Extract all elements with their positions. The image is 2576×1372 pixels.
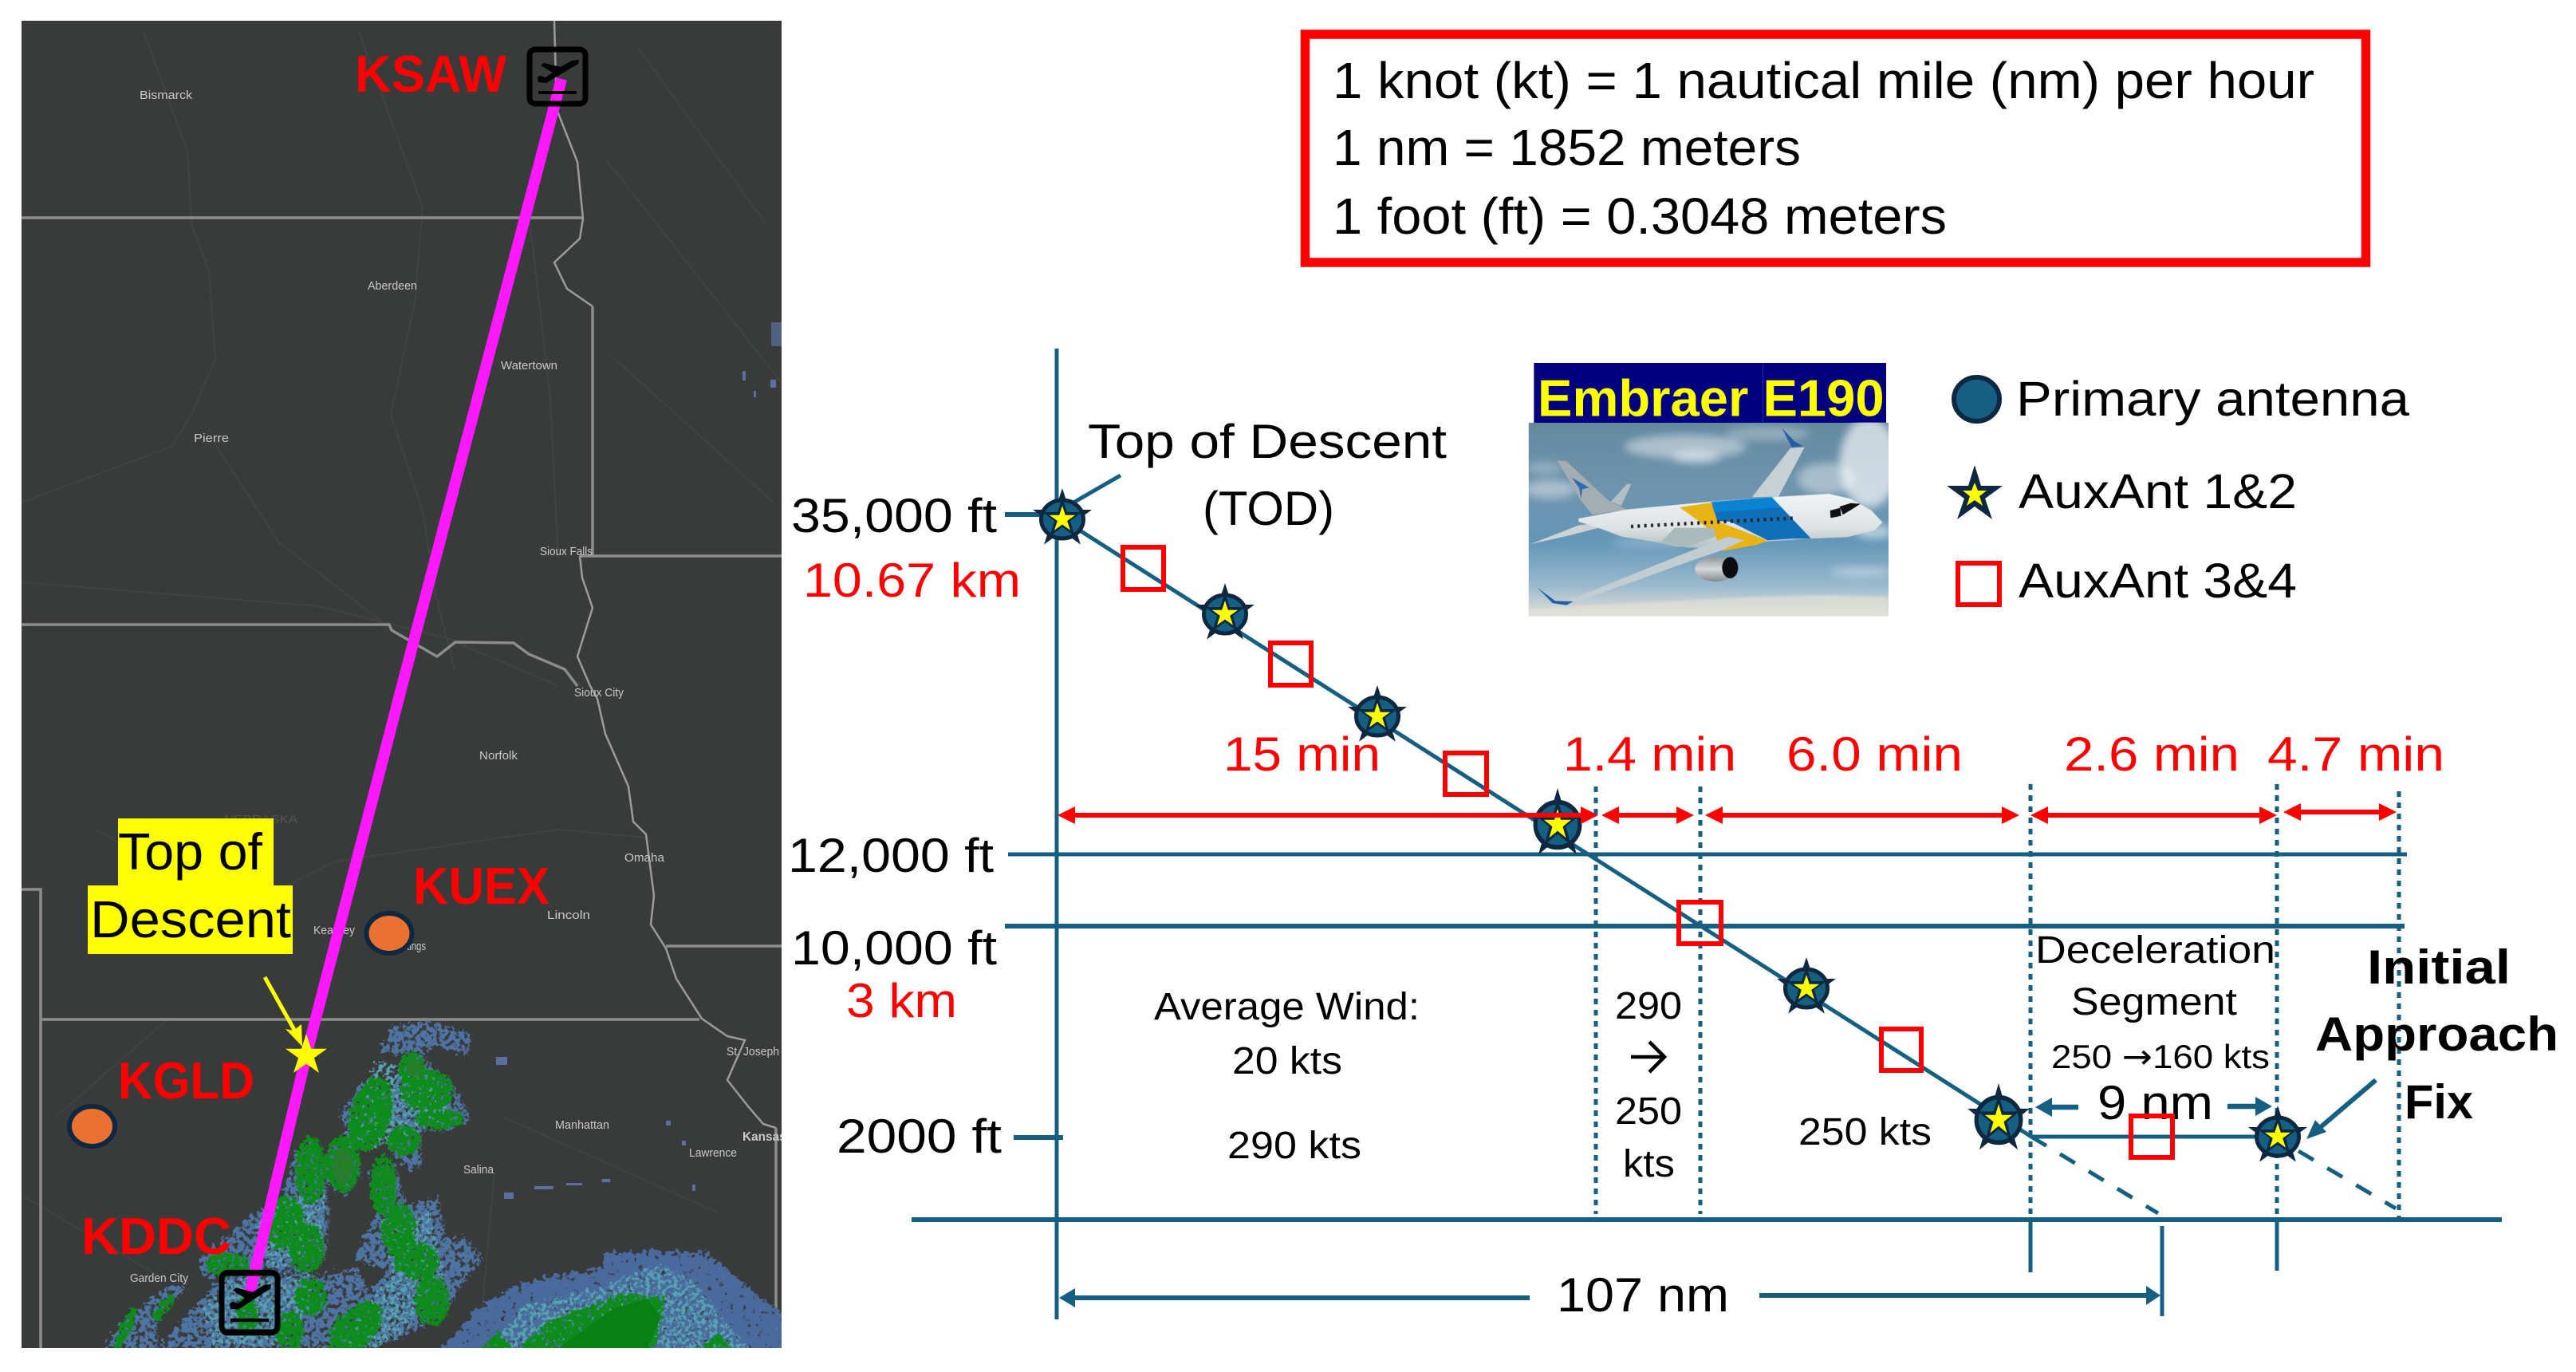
near wing bbox=[1574, 536, 1745, 598]
dimension: 107 nm: 107 nm bbox=[1557, 1268, 1729, 1322]
altitude labels bbox=[788, 489, 1021, 1163]
panel: unit conversions: 1 nm = 1852 meters bbox=[1333, 119, 1801, 176]
label: KSAW: KSAW bbox=[355, 45, 507, 103]
city labels: Kansas City bbox=[742, 1130, 813, 1144]
windows bbox=[1631, 518, 1796, 526]
label: top of descent: Top of Descent bbox=[1088, 415, 1447, 468]
city labels: Manhattan bbox=[555, 1118, 609, 1132]
panel: unit conversions bbox=[1305, 34, 2365, 262]
label: speed change 290 to 250 kts: kts bbox=[1623, 1143, 1675, 1185]
city labels: Garden City bbox=[130, 1271, 188, 1285]
city labels: Salina bbox=[463, 1163, 494, 1177]
label: deceleration segment: 250 →160 kts bbox=[2051, 1037, 2270, 1076]
red time arrows bbox=[1058, 803, 2397, 824]
engine bbox=[1695, 557, 1729, 582]
dimension: 107 nm bbox=[1059, 1268, 2160, 1322]
title bar: Embraer E190 bbox=[1538, 369, 1885, 428]
altitude labels: 12,000 ft bbox=[788, 829, 994, 882]
label: average wind and cruise speed: Average Wind: bbox=[1154, 986, 1420, 1028]
time labels bbox=[1223, 727, 2444, 781]
leader: top of descent bbox=[1073, 475, 1121, 503]
city labels: NEBRASKA bbox=[224, 813, 297, 826]
city labels bbox=[130, 89, 813, 1285]
flight path bbox=[249, 79, 561, 1296]
city labels: Pierre bbox=[194, 432, 229, 445]
arrow: to initial approach fix bbox=[2306, 1080, 2376, 1139]
altitude labels: 35,000 ft bbox=[791, 489, 997, 542]
label: average wind and cruise speed: 290 kts bbox=[1227, 1125, 1361, 1167]
label: speed change 290 to 250 kts: 290 bbox=[1615, 985, 1682, 1027]
label: 9 nm distance: 9 nm bbox=[2097, 1076, 2213, 1130]
distance ticks bbox=[2030, 1220, 2277, 1316]
label: deceleration segment bbox=[2035, 929, 2275, 1076]
panel: Embraer E190 photo bbox=[1523, 363, 1898, 617]
callout: top of descent on map bbox=[88, 818, 293, 954]
label: deceleration segment: Segment bbox=[2071, 981, 2237, 1023]
city labels: Kearney bbox=[313, 924, 355, 937]
time labels: 15 min bbox=[1223, 727, 1381, 781]
panel: unit conversions: 1 foot (ft) = 0.3048 meters bbox=[1333, 187, 1947, 245]
altitude labels: 3 km bbox=[846, 974, 957, 1027]
label: initial approach fix: Initial bbox=[2367, 940, 2511, 994]
aircraft photo bbox=[1523, 417, 1898, 617]
city labels: Watertown bbox=[501, 359, 557, 373]
city labels: Lawrence bbox=[689, 1146, 737, 1160]
label: speed change 290 to 250 kts bbox=[1615, 985, 1682, 1185]
cockpit bbox=[1830, 508, 1841, 518]
panel: radar map bbox=[22, 21, 813, 1366]
dotted segment dividers bbox=[1596, 784, 2399, 1220]
city labels: Omaha bbox=[624, 851, 665, 865]
radar core greens bbox=[558, 1299, 660, 1348]
city labels: Sioux City bbox=[574, 686, 624, 700]
tick: 35,000 ft bbox=[1005, 512, 1057, 517]
icon: KGLD radar site bbox=[69, 1106, 115, 1146]
label: top of descent bbox=[1088, 415, 1447, 535]
axis: ground bbox=[912, 1217, 2502, 1222]
label: initial approach fix bbox=[2315, 940, 2558, 1129]
time labels: 6.0 min bbox=[1786, 727, 1963, 781]
panel: unit conversions: 1 knot (kt) = 1 nautical mile (nm) per hour bbox=[1333, 52, 2314, 109]
label: average wind and cruise speed bbox=[1154, 986, 1420, 1167]
altitude labels: 2000 ft bbox=[837, 1110, 1002, 1163]
city labels: Sioux Falls bbox=[540, 545, 593, 558]
gridline: 12,000 ft bbox=[1008, 852, 2407, 857]
county and river lines bbox=[22, 32, 782, 1348]
auxiliary antenna squares bbox=[1123, 547, 1921, 1070]
axis: altitude bbox=[1054, 349, 1059, 1319]
altitude labels: 10,000 ft bbox=[791, 921, 997, 975]
altitude labels: 10.67 km bbox=[803, 554, 1021, 607]
icon: KDDC airport bbox=[222, 1273, 278, 1332]
label: 250 kts: 250 kts bbox=[1798, 1111, 1932, 1153]
time labels: 1.4 min bbox=[1563, 727, 1736, 781]
small radar blips bbox=[496, 322, 782, 1199]
label: KDDC: KDDC bbox=[81, 1207, 231, 1265]
city labels: Aberdeen bbox=[368, 279, 417, 293]
city labels: St. Joseph bbox=[727, 1045, 779, 1059]
label: initial approach fix: Fix bbox=[2405, 1075, 2473, 1129]
extended glide slope 1 bbox=[2031, 1137, 2158, 1213]
extended glide slope 2 bbox=[2298, 1151, 2396, 1208]
time labels: 2.6 min bbox=[2064, 727, 2239, 781]
legend: primary antenna: Primary antenna bbox=[2016, 372, 2409, 426]
label: top of descent: (TOD) bbox=[1203, 482, 1334, 535]
time labels: 4.7 min bbox=[2267, 727, 2444, 781]
tick: 2000 ft bbox=[1014, 1135, 1063, 1140]
city labels: Norfolk bbox=[479, 749, 518, 763]
state borders bbox=[22, 218, 782, 1348]
label: KGLD: KGLD bbox=[118, 1051, 254, 1110]
auxiliary antenna squares over labels bbox=[2131, 1116, 2172, 1157]
fuselage bbox=[1578, 494, 1883, 550]
city labels: Lincoln bbox=[547, 909, 590, 922]
radar echoes bbox=[107, 322, 790, 1366]
primary antenna markers bbox=[1033, 488, 2307, 1162]
label: initial approach fix: Approach bbox=[2315, 1007, 2558, 1061]
label: deceleration segment: Deceleration bbox=[2035, 929, 2275, 972]
label: average wind and cruise speed: 20 kts bbox=[1232, 1040, 1342, 1082]
label: KUEX: KUEX bbox=[413, 857, 549, 915]
callout: top of descent on map: Descent bbox=[90, 890, 291, 948]
icon: KSAW airport bbox=[530, 49, 585, 104]
descent path bbox=[1062, 519, 2278, 1137]
icon: top of descent star bbox=[286, 1034, 327, 1073]
legend bbox=[1947, 372, 2409, 608]
icon: KUEX radar site bbox=[367, 913, 412, 953]
livery bbox=[1680, 503, 1768, 551]
far wing bbox=[1752, 447, 1805, 497]
legend: auxiliary antennas 3 and 4: AuxAnt 3&4 bbox=[2019, 554, 2297, 608]
city labels: Bismarck bbox=[140, 89, 193, 102]
city labels: Hastings bbox=[391, 940, 426, 953]
chart: descent profile bbox=[788, 349, 2558, 1322]
label: 9 nm distance bbox=[2035, 1076, 2272, 1130]
tail bbox=[1558, 460, 1626, 514]
legend: auxiliary antennas 1 and 2: AuxAnt 1&2 bbox=[2019, 464, 2297, 518]
label: speed change 290 to 250 kts: 250 bbox=[1615, 1090, 1682, 1133]
arrow: to top of descent point bbox=[265, 977, 302, 1047]
callout: top of descent on map: Top of bbox=[118, 822, 263, 881]
gridline: 10,000 ft bbox=[1005, 924, 2405, 928]
